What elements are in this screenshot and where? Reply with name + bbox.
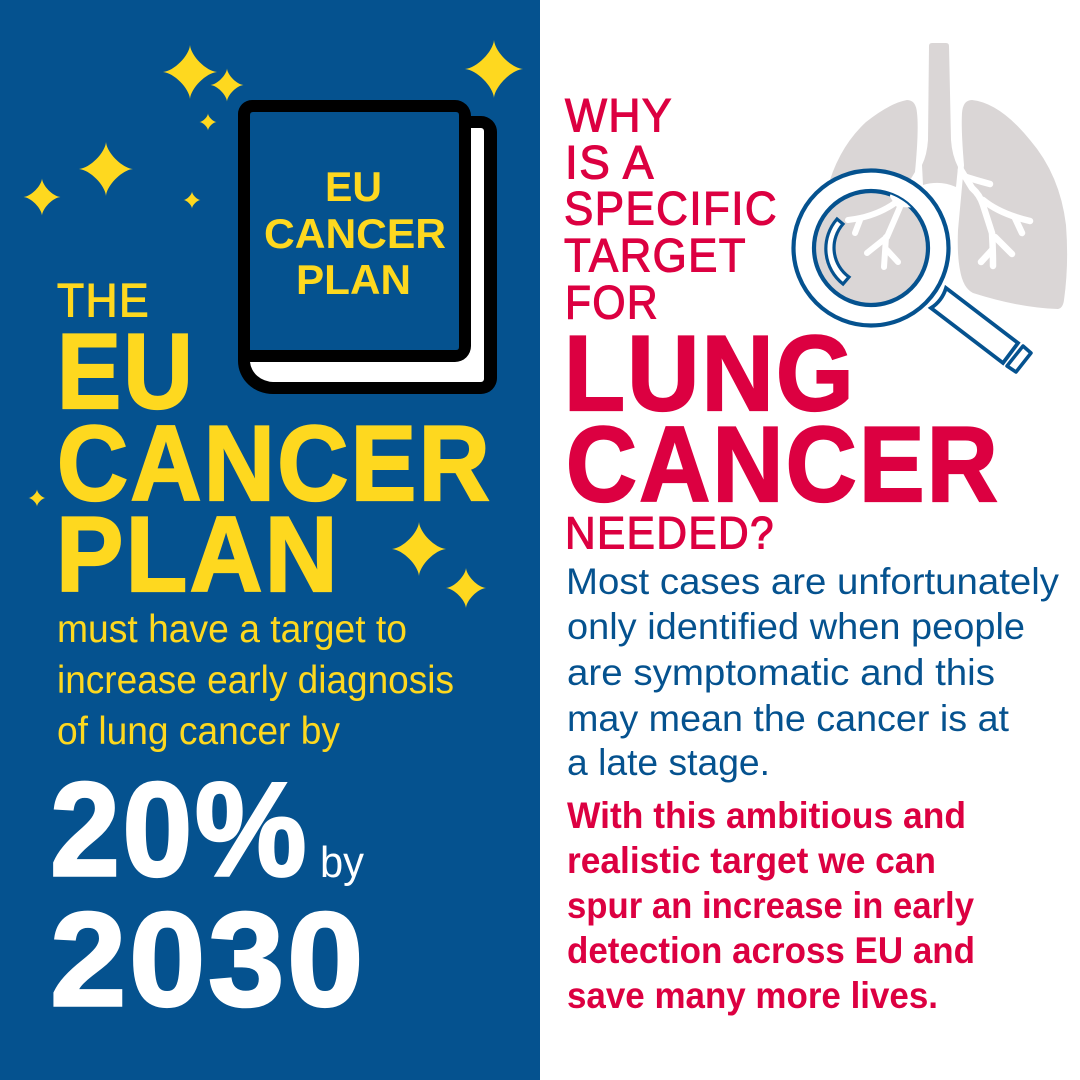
text block: target statement (57, 608, 454, 753)
book cover title: PLAN (296, 256, 411, 303)
icon: EU Cancer Plan book (238, 100, 497, 394)
book outline (238, 100, 497, 394)
heading: lung cancer (564, 313, 1000, 524)
text block: late diagnosis explanation: a late stage. (567, 742, 770, 783)
text block: call to action: save many more lives. (567, 975, 938, 1016)
left bronchi in lens (845, 194, 911, 270)
heading: why is a specific target for (564, 88, 778, 328)
heading: why is a specific target for: IS A (565, 135, 655, 188)
trachea (922, 43, 958, 187)
heading: why is a specific target for: WHY (565, 88, 673, 141)
text block: call to action: detection across EU and (567, 930, 975, 971)
heading: The EU Cancer Plan: CANCER (57, 403, 492, 523)
heading: lung cancer: LUNG (564, 313, 856, 433)
text block: late diagnosis explanation: only identified when people (567, 606, 1025, 647)
left lung (827, 100, 918, 230)
book cover (250, 112, 459, 350)
heading: needed: NEEDED? (565, 507, 775, 558)
stat: 20% by 2030 (50, 756, 366, 1034)
heading: The EU Cancer Plan: THE (57, 273, 150, 326)
heading: why is a specific target for: TARGET (564, 228, 747, 281)
right lung (958, 100, 1067, 309)
text block: call to action: With this ambitious and (567, 795, 966, 836)
panel: blue left background (0, 0, 540, 1080)
text block: target statement: must have a target to (57, 608, 407, 651)
lens glare (826, 219, 849, 284)
text block: late diagnosis explanation: are symptomatic and this (567, 652, 995, 693)
text block: target statement: increase early diagnosis (57, 659, 454, 702)
magnifier handle (931, 288, 1018, 363)
icon: gold stars (24, 40, 523, 608)
heading: lung cancer: CANCER (566, 404, 1000, 524)
heading: why is a specific target for: FOR (565, 275, 659, 328)
book cover title: CANCER (264, 210, 446, 257)
stat: 20% by 2030: 20% (50, 756, 309, 904)
text block: call to action (567, 795, 975, 1016)
text block: target statement: of lung cancer by (57, 710, 340, 753)
text block: late diagnosis explanation (566, 561, 1060, 783)
heading: The EU Cancer Plan: EU (57, 311, 195, 431)
book cover title (264, 163, 446, 303)
text block: call to action: realistic target we can (567, 840, 936, 881)
text block: late diagnosis explanation: may mean the cancer is at (567, 698, 1010, 739)
book cover title: EU (325, 163, 382, 210)
panel: white right background (540, 0, 1080, 1080)
heading: why is a specific target for: SPECIFIC (564, 181, 778, 234)
magnifier lens ring (794, 170, 948, 326)
text block: call to action: spur an increase in early (567, 885, 974, 926)
magnifier lens (814, 191, 928, 305)
right bronchi (961, 170, 1030, 266)
stat: 20% by 2030: 2030 (50, 886, 366, 1034)
text block: late diagnosis explanation: Most cases are unfortunately (566, 561, 1060, 602)
heading: The EU Cancer Plan: PLAN (56, 494, 340, 614)
book pages (250, 128, 484, 382)
icon: lungs under magnifying glass (794, 43, 1067, 372)
magnifier handle cap (1007, 346, 1031, 372)
heading: The EU Cancer Plan (56, 273, 492, 614)
stat: 20% by 2030: by (320, 838, 364, 887)
